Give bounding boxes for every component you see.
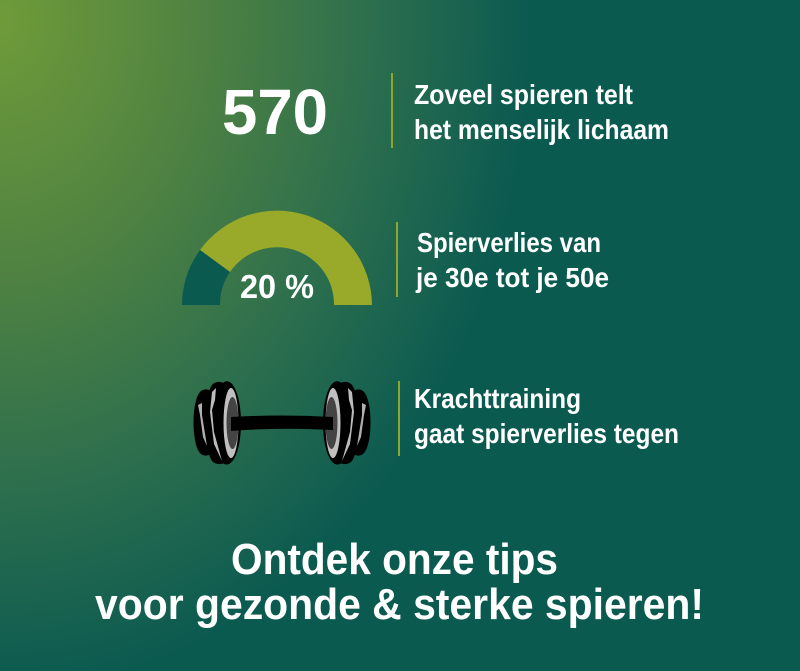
stat: 20 % muscle loss — [182, 211, 609, 305]
call to action heading — [95, 535, 704, 629]
text: strength training description: gaat spierverlies tegen — [414, 418, 679, 449]
text: muscle loss description — [415, 227, 609, 293]
divider line — [391, 73, 393, 148]
gauge: 20 % segment — [182, 250, 230, 305]
stat: strength training — [194, 381, 679, 465]
stat: 570 muscles — [222, 73, 669, 148]
left plates — [194, 381, 241, 465]
text: strength training description — [414, 383, 679, 449]
divider line — [398, 381, 400, 456]
text: muscle loss description: Spierverlies van — [417, 227, 601, 258]
divider line — [396, 222, 398, 297]
icon: barbell — [194, 381, 370, 465]
text: muscle loss description: je 30e tot je 50e — [415, 262, 609, 293]
text: muscle count description — [414, 79, 669, 145]
number: 570: 570 — [222, 76, 328, 148]
barbell bar — [231, 416, 333, 431]
call to action heading: Ontdek onze tips — [231, 535, 558, 584]
text: muscle count description: Zoveel spieren telt — [414, 79, 633, 110]
gauge: 80 % segment — [200, 211, 372, 305]
call to action heading: voor gezonde & sterke spieren! — [95, 580, 704, 629]
text: muscle count description: het menselijk lichaam — [414, 114, 669, 145]
gauge chart — [182, 211, 372, 305]
gauge label: 20 % — [240, 268, 314, 305]
text: strength training description: Krachttraining — [414, 383, 581, 414]
right plates — [323, 381, 370, 465]
